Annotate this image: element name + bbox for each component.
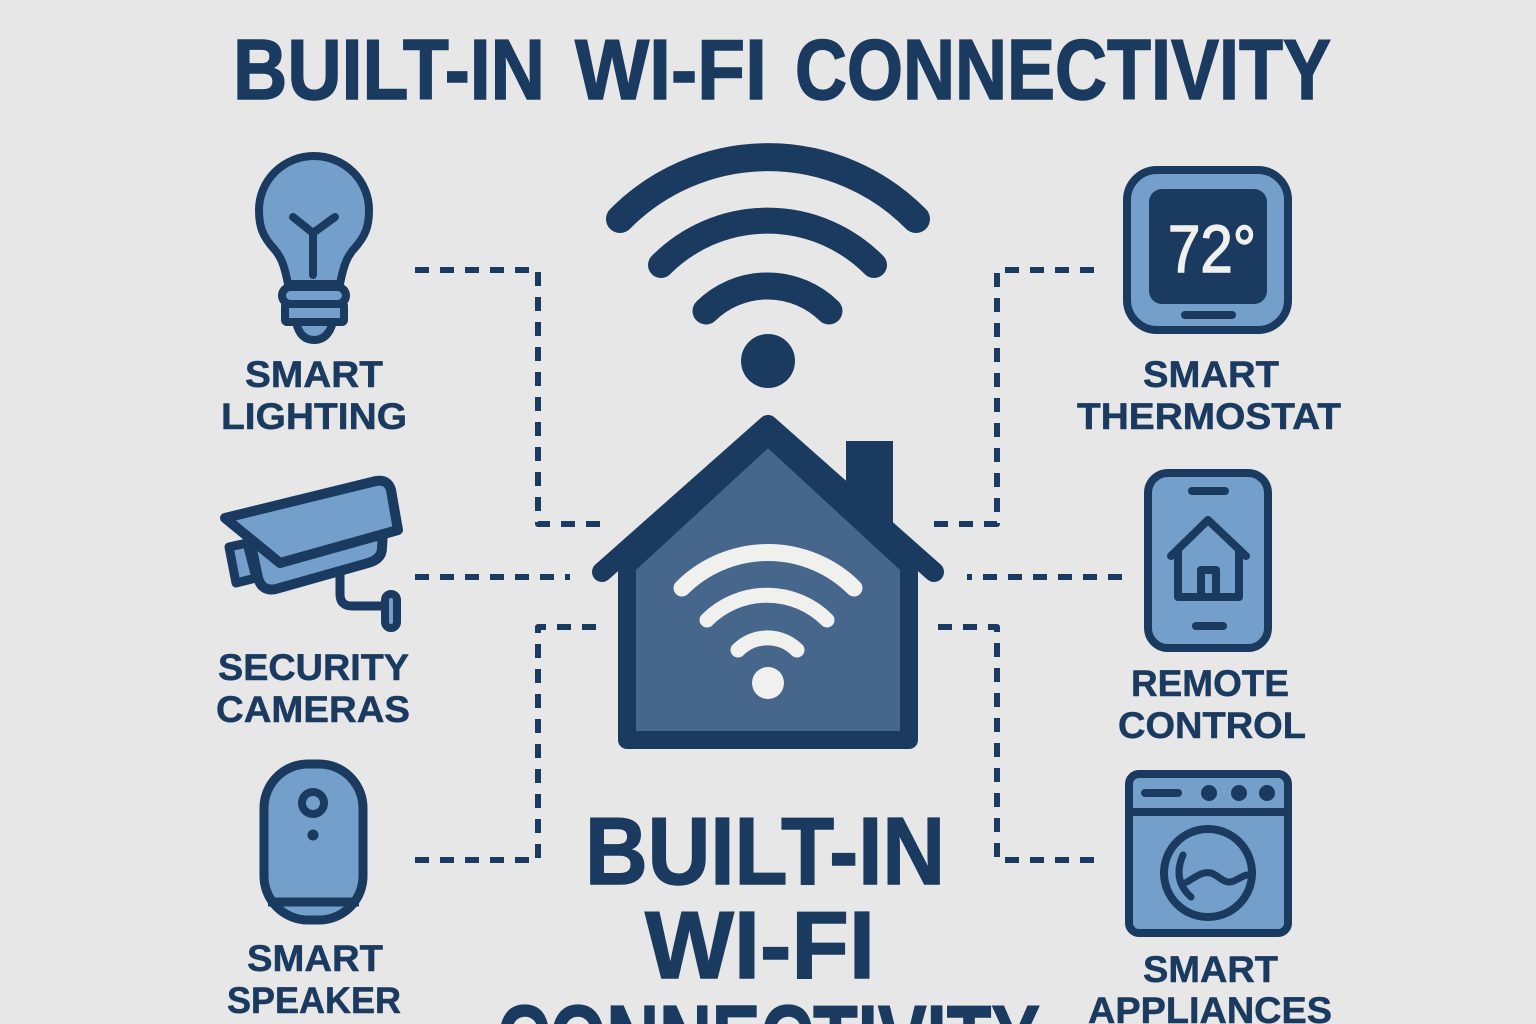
title: WI-FI bbox=[575, 23, 767, 118]
label: security cameras bbox=[216, 647, 410, 730]
title: BUILT-IN bbox=[233, 23, 545, 118]
thermostat reading: 72° bbox=[1168, 212, 1256, 287]
connector: smart lighting to house bbox=[415, 270, 604, 524]
connector: security cameras to house bbox=[415, 574, 570, 580]
label: smart speaker: SMART bbox=[247, 938, 383, 979]
centre heading bbox=[497, 798, 1040, 1024]
label: security cameras: CAMERAS bbox=[216, 689, 410, 730]
label: smart thermostat: THERMOSTAT bbox=[1077, 396, 1341, 437]
icon: security camera bbox=[225, 481, 398, 628]
title: CONNECTIVITY bbox=[795, 23, 1331, 118]
connector: remote control to house bbox=[967, 574, 1122, 580]
icon: washing machine bbox=[1129, 774, 1288, 933]
icon: smart speaker bbox=[264, 764, 363, 920]
label: remote control bbox=[1118, 663, 1306, 746]
house wifi symbol bbox=[682, 553, 854, 699]
label: security cameras: SECURITY bbox=[218, 647, 409, 688]
connector: smart thermostat to house bbox=[931, 270, 1094, 524]
label: smart lighting: SMART bbox=[245, 354, 383, 395]
label: smart speaker bbox=[227, 938, 401, 1021]
icon: light bulb bbox=[259, 156, 369, 340]
label: smart appliances: SMART bbox=[1143, 949, 1278, 990]
centre heading: BUILT-IN bbox=[585, 798, 945, 905]
label: smart lighting bbox=[221, 354, 407, 437]
large wifi symbol bbox=[620, 157, 916, 388]
icon: thermostat bbox=[1127, 170, 1288, 330]
label: smart appliances bbox=[1088, 949, 1332, 1024]
label: remote control: REMOTE bbox=[1131, 663, 1289, 704]
label: smart lighting: LIGHTING bbox=[221, 396, 407, 437]
label: smart thermostat: SMART bbox=[1143, 354, 1279, 395]
label: smart thermostat bbox=[1077, 354, 1341, 437]
centre heading: WI-FI bbox=[645, 892, 875, 999]
title bbox=[233, 23, 1331, 118]
label: remote control: CONTROL bbox=[1118, 705, 1306, 746]
connector: smart speaker to house bbox=[415, 627, 604, 860]
connector: smart appliances to house bbox=[931, 627, 1094, 860]
icon: phone with home app bbox=[1148, 473, 1268, 648]
central house icon bbox=[602, 425, 934, 740]
label: smart speaker: SPEAKER bbox=[227, 980, 401, 1021]
